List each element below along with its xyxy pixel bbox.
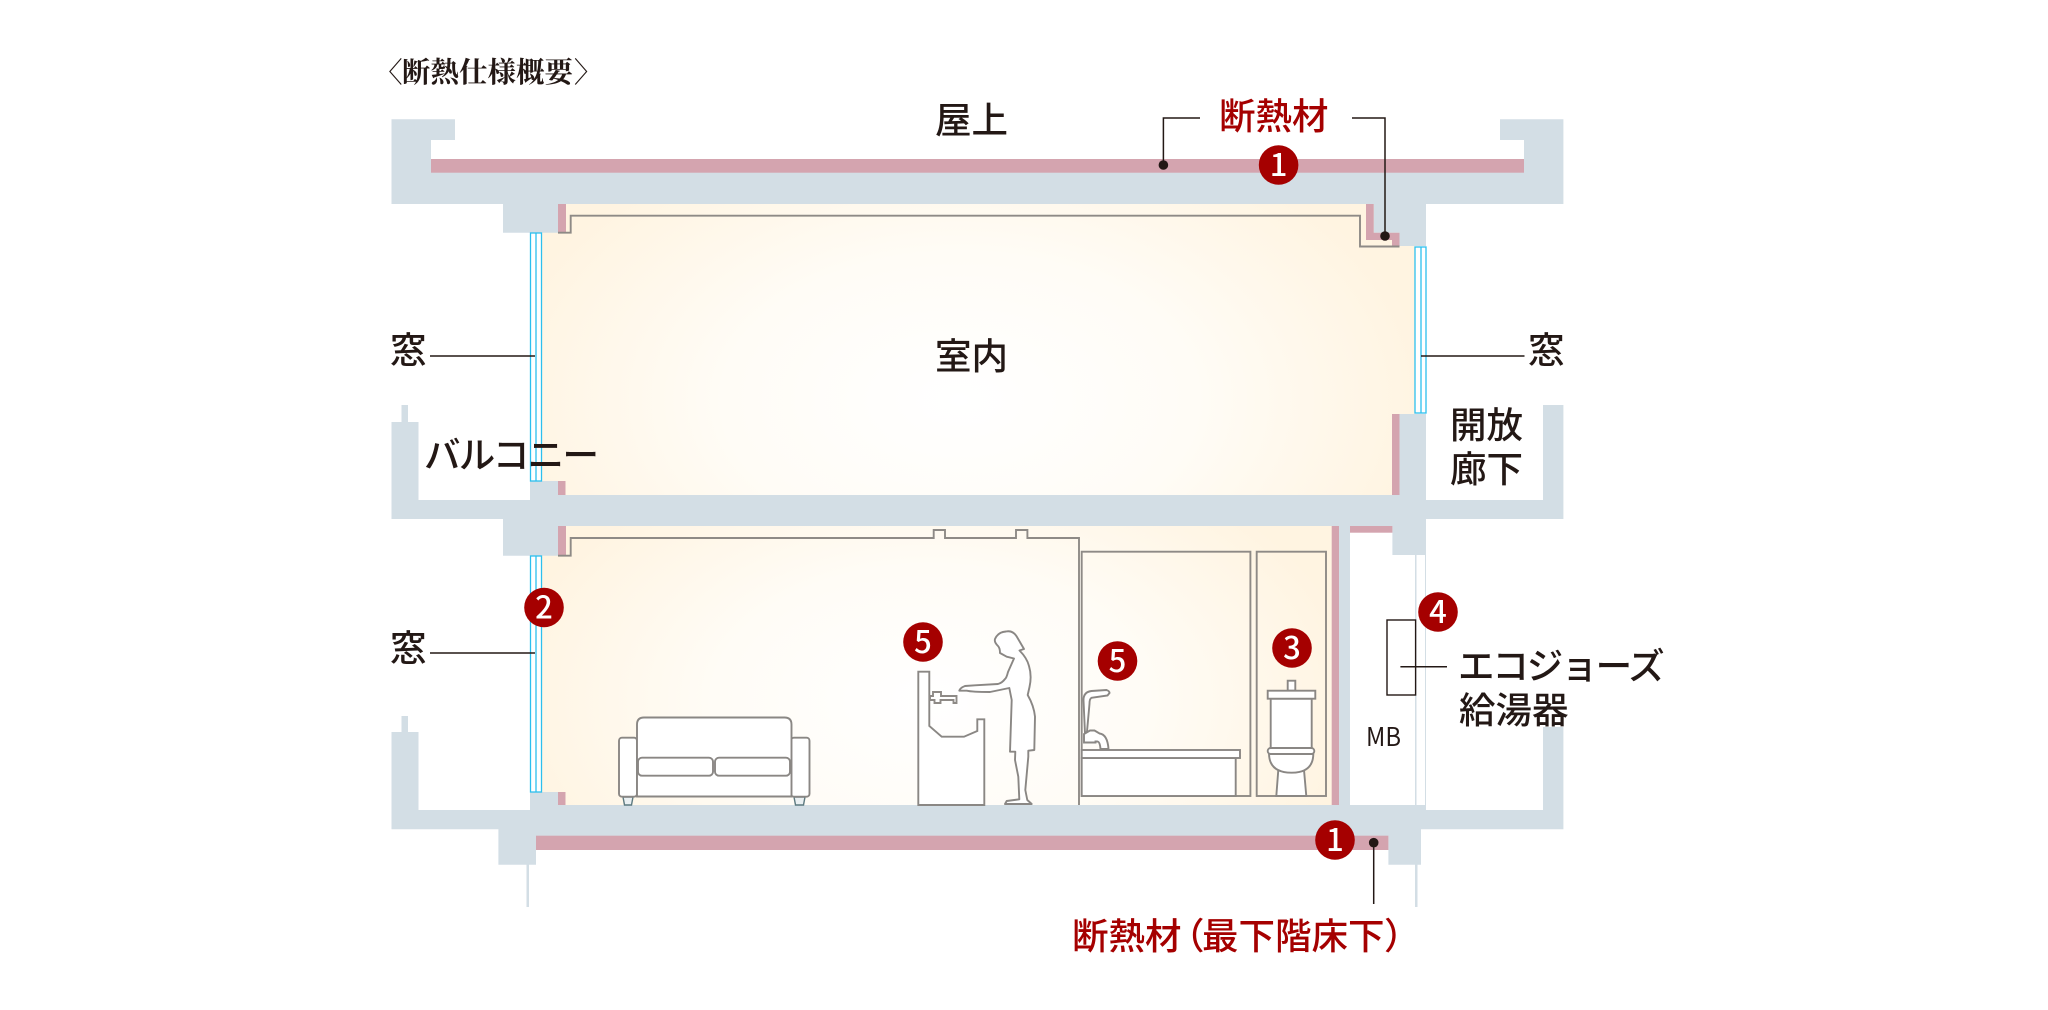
label: window left lower: 窓 [390, 619, 426, 672]
heading: 〉 [574, 50, 603, 91]
middle floor slab, balcony and corridor walls [392, 405, 1563, 556]
MB partition wall [1339, 526, 1350, 805]
water heater [1387, 620, 1416, 695]
label: insulation bottom with leader [1072, 838, 1420, 960]
badge 4: 4 [1429, 587, 1447, 632]
leader: window left upper [430, 355, 535, 357]
label: window right: 窓 [1528, 321, 1564, 374]
bathtub [1082, 690, 1240, 796]
windows [530, 233, 1426, 792]
toilet [1268, 681, 1315, 796]
badge 5 washbasin: 5 [914, 617, 932, 662]
badge 1 top [1259, 140, 1298, 185]
heading: 断 [402, 50, 431, 91]
washbasin [918, 672, 984, 805]
label: insulation bottom with leader: 断熱材 [1072, 907, 1182, 960]
label: insulation top with leaders [1159, 87, 1390, 241]
badge 1 bottom: 1 [1326, 815, 1344, 860]
label: open corridor [1450, 396, 1523, 493]
badge 1 bottom [1315, 815, 1355, 860]
leader: water heater [1400, 666, 1447, 668]
bathroom and toilet room partitions [1082, 552, 1326, 796]
label: interior: 室内 [935, 327, 1008, 380]
badge 2: 2 [535, 582, 553, 628]
person silhouette [959, 631, 1035, 804]
label: eco-jozu water heater [1458, 637, 1664, 734]
label: open corridor: 開放 [1450, 396, 1523, 449]
label: open corridor: 廊下 [1450, 440, 1523, 493]
badge 5 bathroom [1098, 636, 1137, 681]
label: insulation top with leaders: 断熱材 [1219, 87, 1328, 140]
label: MB: MB [1366, 717, 1401, 754]
foundation thin lines [526, 555, 1426, 907]
badge 5 bathroom: 5 [1109, 636, 1126, 681]
interior lower room [541, 526, 1332, 805]
badge 3: 3 [1283, 623, 1301, 668]
heading: 熱 [430, 50, 462, 91]
label: balcony: バルコニー [424, 426, 597, 479]
badge 4 [1418, 587, 1458, 632]
label: insulation bottom with leader: 最下階床下 [1202, 907, 1384, 960]
badge 1 top: 1 [1270, 140, 1287, 185]
label: rooftop: 屋上 [935, 91, 1008, 144]
ceiling line upper [558, 216, 1400, 246]
sofa [619, 718, 810, 805]
label: eco-jozu water heater: エコジョーズ [1458, 637, 1664, 690]
insulation: pink bands [431, 159, 1524, 850]
badge 2 [524, 582, 564, 628]
heading: 〈 [374, 50, 403, 91]
leader: window right [1421, 355, 1524, 357]
badge 3 [1272, 623, 1312, 668]
label: insulation bottom with leader: （ [1168, 907, 1204, 960]
lower floor slab, balcony and corridor walls [392, 716, 1563, 865]
roof slab and parapets [392, 119, 1563, 246]
heading: 要 [544, 50, 574, 91]
ceiling line lower [558, 530, 1079, 805]
heading: 概 [516, 50, 545, 91]
label: window left upper: 窓 [390, 321, 426, 374]
badge 5 washbasin [903, 617, 943, 662]
heading: 仕 [459, 50, 488, 91]
label: insulation bottom with leader: ） [1384, 907, 1420, 960]
label: eco-jozu water heater: 給湯器 [1459, 681, 1568, 734]
leader: window left lower [430, 652, 535, 654]
heading: 様 [488, 50, 516, 91]
interior upper room [541, 204, 1415, 495]
